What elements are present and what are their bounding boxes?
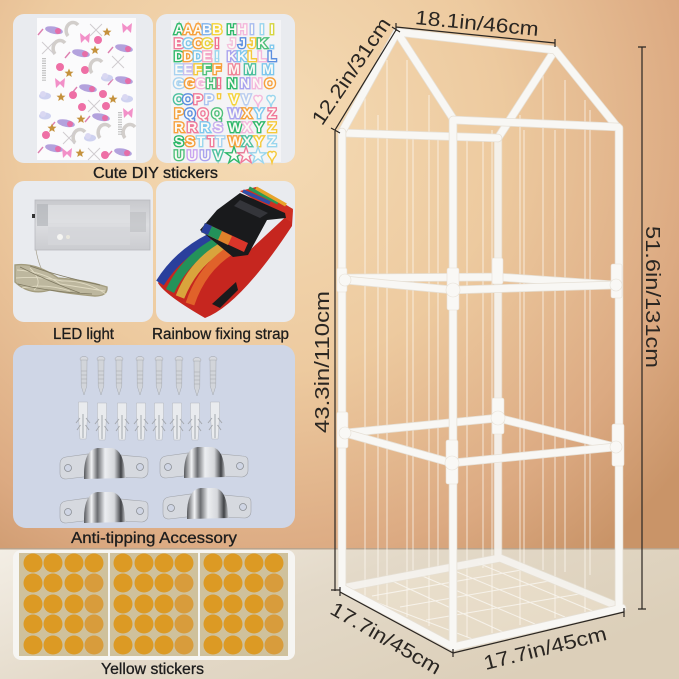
panel: cute DIY stickers, alphabet sheet: V — [213, 147, 223, 163]
panel: cute DIY stickers, alphabet sheet: Y — [254, 119, 264, 135]
panel: cute DIY stickers, alphabet sheet: S — [213, 119, 223, 135]
panel: cute DIY stickers, alphabet sheet: K — [257, 35, 267, 51]
wall anchors — [76, 402, 222, 440]
dimension: base width 17.7in/45cm: 17.7in/45cm — [481, 623, 609, 675]
pipe joints — [337, 258, 624, 484]
panel: cute DIY stickers, alphabet sheet: Z — [268, 133, 277, 149]
pipe clamps — [60, 447, 251, 523]
panel: cute DIY stickers, alphabet sheet: C — [202, 35, 212, 51]
label: Rainbow fixing strap: Rainbow fixing strap — [152, 326, 289, 343]
buckle — [200, 193, 286, 257]
panel: cute DIY stickers, alphabet sheet: C — [183, 35, 193, 51]
panel: cute DIY stickers, alphabet sheet: G — [196, 75, 207, 91]
panel: cute DIY stickers, alphabet sheet: R — [187, 119, 197, 135]
panel: cute DIY stickers, alphabet sheet: W — [228, 119, 242, 135]
panel: cute DIY stickers, alphabet sheet: G — [174, 75, 185, 91]
strap band — [158, 210, 293, 318]
panel: cute DIY stickers, alphabet sheet: P — [174, 105, 184, 121]
dimension: total height 51.6in/131cm: 51.6in/131cm — [641, 226, 663, 368]
panel: cute DIY stickers, alphabet sheet: Q — [198, 105, 209, 121]
dimension: base depth 17.7in/45cm: 17.7in/45cm — [326, 598, 445, 679]
dimension: roof ridge 18.1in/46cm: 18.1in/46cm — [414, 7, 540, 41]
panel: cute DIY stickers, alphabet sheet: P — [204, 91, 214, 107]
panel: cute DIY stickers, alphabet sheet: Q — [185, 105, 196, 121]
panel: cute DIY stickers, alphabet sheet: G — [185, 75, 196, 91]
panel: cute DIY stickers, alphabet sheet: ' — [217, 91, 221, 107]
panel: cute DIY stickers, alphabet sheet: K — [237, 48, 247, 64]
front posts and front pipes — [342, 120, 622, 647]
panel: cute DIY stickers, alphabet sheet: A — [174, 21, 184, 37]
dimension: roof ridge 18.1in/46cm — [396, 7, 555, 47]
label: LED light: LED light — [53, 326, 115, 343]
panel: cute DIY stickers, alphabet sheet: ♥ — [254, 91, 262, 107]
panel: cute DIY stickers, alphabet sheet: S — [174, 133, 184, 149]
panel: cute DIY stickers, alphabet sheet: L — [248, 48, 257, 64]
panel: cute DIY stickers, unicorn sheet — [13, 14, 153, 163]
panel: cute DIY stickers, alphabet sheet: A — [193, 21, 203, 37]
panel: cute DIY stickers, alphabet sheet: J — [238, 35, 246, 51]
panel: cute DIY stickers, alphabet sheet: F — [194, 61, 203, 77]
panel: cute DIY stickers, alphabet sheet: Z — [268, 105, 277, 121]
panel: cute DIY stickers, alphabet sheet: H — [206, 75, 216, 91]
panel: cute DIY stickers, alphabet sheet: . — [270, 35, 274, 51]
panel: cute DIY stickers, alphabet sheet: I — [250, 21, 254, 37]
panel: LED light — [13, 181, 153, 322]
panel: cute DIY stickers, alphabet sheet: Z — [268, 119, 277, 135]
panel: cute DIY stickers, alphabet sheet: E — [202, 48, 212, 64]
panel: cute DIY stickers, alphabet sheet: I — [270, 21, 274, 37]
panel: cute DIY stickers, alphabet sheet: E — [183, 61, 193, 77]
panel: cute DIY stickers, alphabet sheet: D — [183, 48, 193, 64]
panel: cute DIY stickers, alphabet sheet: F — [213, 61, 222, 77]
panel: cute DIY stickers, alphabet sheet: I — [260, 21, 264, 37]
panel: cute DIY stickers, alphabet sheet: O — [265, 75, 276, 91]
roof ridge and gables — [342, 32, 618, 132]
panel: cute DIY stickers, alphabet sheet — [156, 14, 295, 163]
panel: cute DIY stickers, alphabet sheet: ★ — [228, 147, 241, 163]
panel: cute DIY stickers, alphabet sheet: L — [258, 48, 267, 64]
panel: cute DIY stickers, alphabet sheet: N — [240, 75, 250, 91]
panel: cute DIY stickers, alphabet sheet: J — [228, 35, 236, 51]
panel: cute DIY stickers, alphabet sheet: M — [244, 61, 256, 77]
panel: cute DIY stickers, alphabet sheet: ★ — [240, 147, 253, 163]
panel: cute DIY stickers, alphabet sheet: T — [216, 133, 225, 149]
panel: anti-tipping accessory — [13, 345, 295, 528]
panel: cute DIY stickers, alphabet sheet: ! — [217, 75, 221, 91]
panel: cute DIY stickers, alphabet sheet: ♥ — [268, 147, 276, 163]
panel: rainbow fixing strap — [156, 181, 295, 322]
panel: cute DIY stickers, alphabet sheet: ♥ — [267, 91, 275, 107]
panel: cute DIY stickers, alphabet sheet: D — [174, 48, 184, 64]
panel: cute DIY stickers, alphabet sheet: K — [227, 48, 237, 64]
panel: cute DIY stickers, alphabet sheet: N — [227, 75, 237, 91]
panel: cute DIY stickers, alphabet sheet: D — [193, 48, 203, 64]
panel: cute DIY stickers, alphabet sheet: P — [193, 91, 203, 107]
icon: battery box — [32, 200, 150, 270]
panel: cute DIY stickers, alphabet sheet: E — [174, 61, 184, 77]
dimension: wall height 43.3in/110cm — [312, 131, 340, 591]
panel: cute DIY stickers, alphabet sheet: M — [228, 61, 240, 77]
background floor — [0, 548, 679, 679]
panel: cute DIY stickers, alphabet sheet: X — [242, 105, 252, 121]
panel: cute DIY stickers, alphabet sheet: T — [208, 133, 217, 149]
panel: cute DIY stickers, alphabet sheet: B — [202, 21, 212, 37]
panel: cute DIY stickers, alphabet sheet: R — [200, 119, 210, 135]
panel: cute DIY stickers, alphabet sheet: U — [200, 147, 210, 163]
panel: cute DIY stickers, alphabet sheet: ! — [215, 35, 219, 51]
dimension: base width 17.7in/45cm — [453, 608, 624, 675]
panel: cute DIY stickers, alphabet sheet: H — [227, 21, 237, 37]
panel: yellow stickers — [13, 550, 295, 660]
panel: cute DIY stickers, alphabet sheet: B — [212, 21, 222, 37]
panel: cute DIY stickers, alphabet sheet: T — [197, 133, 206, 149]
icon: coiled wire — [15, 265, 107, 296]
panel: cute DIY stickers, alphabet sheet: C — [193, 35, 203, 51]
panel: cute DIY stickers, alphabet sheet: N — [252, 75, 262, 91]
panel: cute DIY stickers, alphabet sheet: R — [174, 119, 184, 135]
dimension: roof slope 12.2in/31cm: 12.2in/31cm — [308, 14, 396, 129]
panel: cute DIY stickers, alphabet sheet: S — [185, 133, 195, 149]
label: Anti-tipping Accessory: Anti-tipping Accessory — [71, 530, 237, 547]
dimension: wall height 43.3in/110cm: 43.3in/110cm — [312, 291, 334, 433]
label: Cute DIY stickers: Cute DIY stickers — [93, 165, 218, 182]
panel: cute DIY stickers, alphabet sheet: L — [268, 48, 277, 64]
panel: cute DIY stickers, alphabet sheet: Y — [254, 105, 264, 121]
hanging strings — [365, 60, 590, 637]
panel: cute DIY stickers, alphabet sheet: A — [183, 21, 193, 37]
panel: cute DIY stickers, alphabet sheet: Q — [212, 105, 223, 121]
panel: cute DIY stickers, alphabet sheet: J — [248, 35, 256, 51]
panel: cute DIY stickers, alphabet sheet: ★ — [252, 147, 265, 163]
panel: cute DIY stickers, alphabet sheet: U — [187, 147, 197, 163]
dimension: total height 51.6in/131cm — [638, 47, 663, 609]
panel: cute DIY stickers, alphabet sheet: W — [228, 105, 242, 121]
panel: cute DIY stickers, alphabet sheet: F — [203, 61, 212, 77]
panel: cute DIY stickers, alphabet sheet: Y — [254, 133, 264, 149]
dimension: base depth 17.7in/45cm — [326, 587, 453, 679]
panel: cute DIY stickers, alphabet sheet: O — [174, 91, 185, 107]
panel: cute DIY stickers, alphabet sheet: X — [242, 133, 252, 149]
screws — [80, 356, 217, 396]
panel: cute DIY stickers, alphabet sheet: V — [229, 91, 239, 107]
floor grid — [342, 558, 622, 647]
panel: cute DIY stickers, alphabet sheet: V — [241, 91, 251, 107]
panel: cute DIY stickers, alphabet sheet: B — [174, 35, 184, 51]
panel: cute DIY stickers, alphabet sheet: X — [242, 119, 252, 135]
panel: cute DIY stickers, alphabet sheet: ! — [215, 48, 219, 64]
back post and back pipes — [342, 50, 622, 608]
panel: cute DIY stickers, alphabet sheet: U — [174, 147, 184, 163]
panel: cute DIY stickers, alphabet sheet: O — [183, 91, 194, 107]
panel: cute DIY stickers, alphabet sheet: W — [228, 133, 242, 149]
panel: cute DIY stickers, alphabet sheet: H — [237, 21, 247, 37]
product: house-shaped wire cage — [337, 32, 624, 647]
label: Yellow stickers: Yellow stickers — [101, 661, 204, 678]
panel: cute DIY stickers, alphabet sheet: M — [262, 61, 274, 77]
